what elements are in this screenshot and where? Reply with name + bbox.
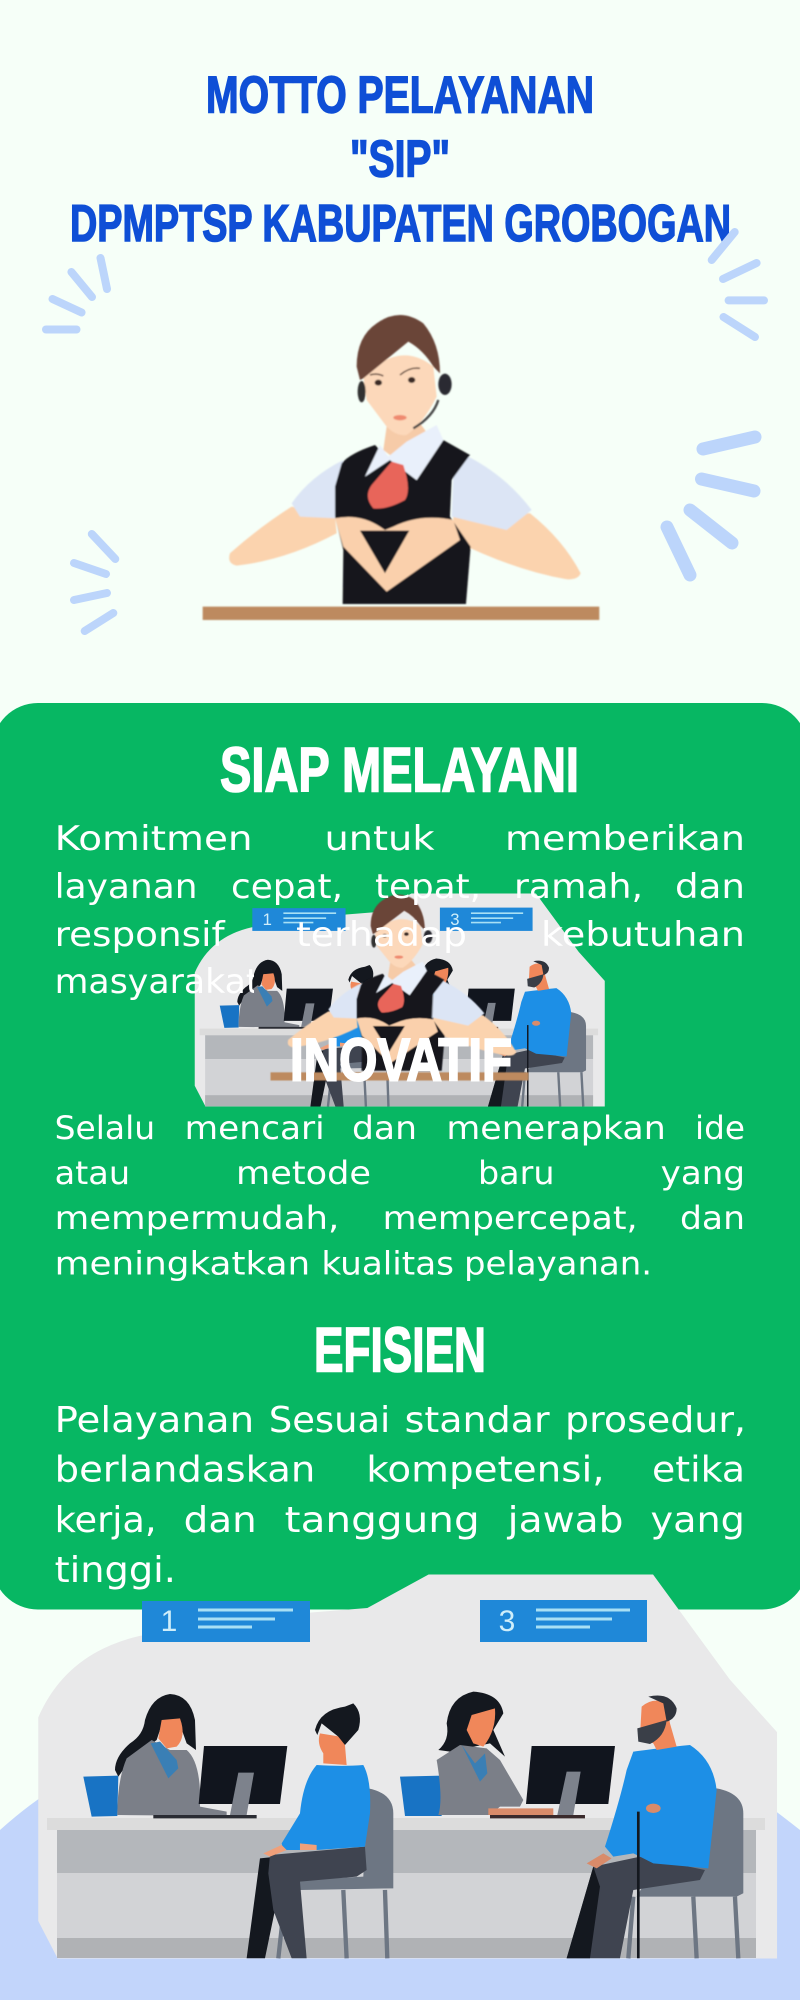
decorative dashes: lower right [667, 437, 755, 575]
heading: INOVATIF: INOVATIF [290, 1026, 512, 1094]
text block: Inovatif description: baru [478, 1154, 554, 1192]
text block: Inovatif description: mempermudah, [55, 1199, 339, 1237]
text block: Efisien description: tanggung [285, 1500, 480, 1541]
bottom blue background shape [0, 1785, 800, 2000]
text block: Siap Melayani description: masyarakat. [55, 962, 271, 1002]
text block: Siap Melayani description: Komitmen [55, 819, 253, 859]
text block: Inovatif description: atau [55, 1154, 130, 1192]
large counter scene illustration: 1 [161, 1605, 177, 1638]
heading: EFISIEN: EFISIEN [314, 1315, 486, 1385]
text block: Efisien description: kompetensi, [366, 1450, 605, 1491]
text block: Inovatif description: metode [236, 1154, 371, 1192]
small counter scene illustration behind the text: 3 [450, 910, 460, 929]
text block: Efisien description: berlandaskan [55, 1450, 315, 1491]
small counter scene illustration behind the text: 1 [263, 910, 272, 929]
text block: Siap Melayani description: memberikan [505, 819, 745, 859]
text block: Siap Melayani description: layanan [55, 867, 198, 907]
text block: Siap Melayani description [55, 819, 745, 1002]
decorative dashes: top right [712, 232, 764, 337]
text block: Siap Melayani description: terhadap [296, 915, 467, 955]
small duplicate of the customer service woman [271, 894, 528, 1080]
green content panel [0, 703, 800, 1610]
large counter scene illustration [38, 1575, 777, 1958]
text block: Efisien description: tinggi. [55, 1550, 176, 1591]
text block: Efisien description: jawab [507, 1500, 624, 1541]
text block: Inovatif description: yang [661, 1154, 745, 1192]
text block: Inovatif description: meningkatkan [55, 1245, 310, 1283]
large counter scene illustration: 3 [499, 1605, 515, 1638]
decorative dashes: lower left [74, 534, 115, 631]
text block: Efisien description: Pelayanan [55, 1400, 254, 1441]
text block: Inovatif description [55, 1109, 745, 1283]
text block: Inovatif description: menerapkan [446, 1109, 666, 1147]
text block: Efisien description: etika [652, 1450, 745, 1491]
decorative dashes: top left [46, 258, 107, 330]
heading: SIAP MELAYANI: SIAP MELAYANI [220, 736, 579, 806]
title [70, 66, 731, 253]
text block: Inovatif description: dan [680, 1199, 745, 1237]
illustration: customer service woman making a heart sign [203, 315, 599, 620]
text block: Siap Melayani description: tepat, [375, 867, 481, 907]
text block: Siap Melayani description: ramah, [514, 867, 643, 907]
text block: Inovatif description: ide [695, 1109, 745, 1147]
text block: Inovatif description: kualitas [321, 1245, 454, 1283]
text block: Siap Melayani description: untuk [324, 819, 435, 859]
text block: Efisien description: standar [405, 1400, 550, 1441]
text block: Efisien description: prosedur, [565, 1400, 746, 1441]
text block: Inovatif description: dan [352, 1109, 417, 1147]
text block: Efisien description [55, 1400, 746, 1591]
text block: Siap Melayani description: kebutuhan [541, 915, 745, 955]
text block: Siap Melayani description: dan [675, 867, 745, 907]
text block: Efisien description: kerja, [55, 1500, 157, 1541]
text block: Inovatif description: Selalu [55, 1109, 155, 1147]
text block: Inovatif description: mempercepat, [383, 1199, 638, 1237]
text block: Efisien description: Sesuai [269, 1400, 390, 1441]
small counter scene illustration behind the text [195, 893, 605, 1107]
title: "SIP" [350, 130, 450, 188]
text block: Inovatif description: mencari [185, 1109, 325, 1147]
title: MOTTO PELAYANAN [206, 66, 594, 124]
text block: Siap Melayani description: responsif [55, 915, 226, 955]
text block: Efisien description: yang [650, 1500, 745, 1541]
text block: Efisien description: dan [184, 1500, 257, 1541]
text block: Inovatif description: pelayanan. [464, 1245, 652, 1283]
text block: Siap Melayani description: cepat, [231, 867, 343, 907]
